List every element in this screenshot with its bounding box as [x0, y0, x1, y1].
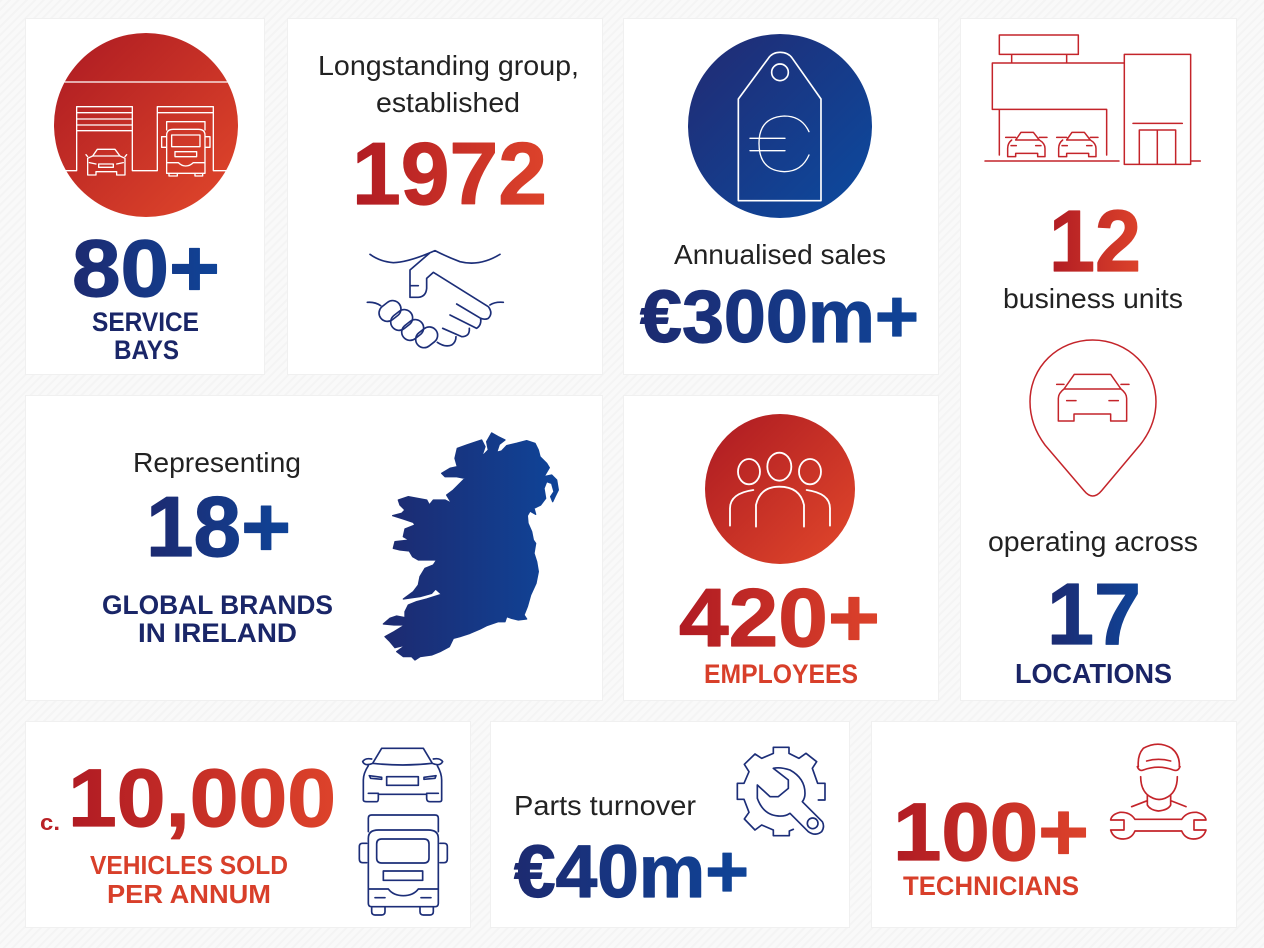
icon: location pin with car — [1030, 340, 1156, 496]
stat: 12: 12 — [1049, 193, 1141, 290]
label: technicians: TECHNICIANS — [903, 871, 1079, 901]
stat: 18+: 18+ — [146, 480, 291, 575]
stat: 80+: 80+ — [72, 224, 220, 314]
stat: 10,000: 10,000 — [68, 753, 336, 844]
label: per annum: PER ANNUM — [107, 879, 271, 909]
stat: 1972: 1972 — [352, 124, 547, 223]
text: longstanding group: Longstanding group, — [318, 50, 579, 81]
stat: 420+: 420+ — [679, 571, 880, 664]
text: established: established — [376, 87, 520, 118]
icon: euro price tag — [688, 34, 872, 218]
panel: vehicles sold — [26, 722, 470, 928]
label: employees: EMPLOYEES — [704, 659, 858, 689]
panel: annualised sales — [624, 18, 938, 374]
icon: dealership building — [985, 35, 1200, 164]
panel: parts turnover — [490, 722, 850, 928]
stat: 40m+: €40m+ — [514, 830, 749, 913]
text: operating across: operating across — [988, 526, 1198, 557]
panel: established 1972 — [288, 18, 602, 374]
icon: car and truck — [359, 748, 447, 915]
panel: employees — [624, 396, 938, 700]
panel: business units and locations — [960, 18, 1236, 700]
text: annualised sales: Annualised sales — [674, 239, 886, 270]
label: locations: LOCATIONS — [1015, 658, 1172, 689]
panel: global brands — [26, 396, 602, 700]
text: circa prefix: c. — [40, 810, 60, 835]
label: global brands: GLOBAL BRANDS — [102, 590, 333, 620]
stat: 300m+: €300m+ — [640, 275, 919, 358]
stat: 17: 17 — [1047, 566, 1141, 663]
icon: technician with wrench — [1111, 744, 1206, 839]
text: representing: Representing — [133, 447, 301, 478]
label: bays: BAYS — [114, 335, 179, 365]
icon: people group — [705, 414, 855, 564]
panel: technicians — [872, 722, 1236, 928]
label: in ireland: IN IRELAND — [138, 618, 297, 648]
label: vehicles sold: VEHICLES SOLD — [90, 850, 288, 880]
text: parts turnover: Parts turnover — [514, 790, 696, 821]
stat: 100+: 100+ — [893, 787, 1089, 878]
label: service: SERVICE — [92, 307, 199, 337]
icon: gear and wrench — [737, 747, 825, 836]
icon: service bays garage — [54, 33, 238, 217]
map: ireland — [383, 433, 558, 660]
panel: service bays — [26, 18, 264, 374]
text: business units: business units — [1003, 283, 1183, 314]
icon: handshake — [367, 251, 503, 351]
